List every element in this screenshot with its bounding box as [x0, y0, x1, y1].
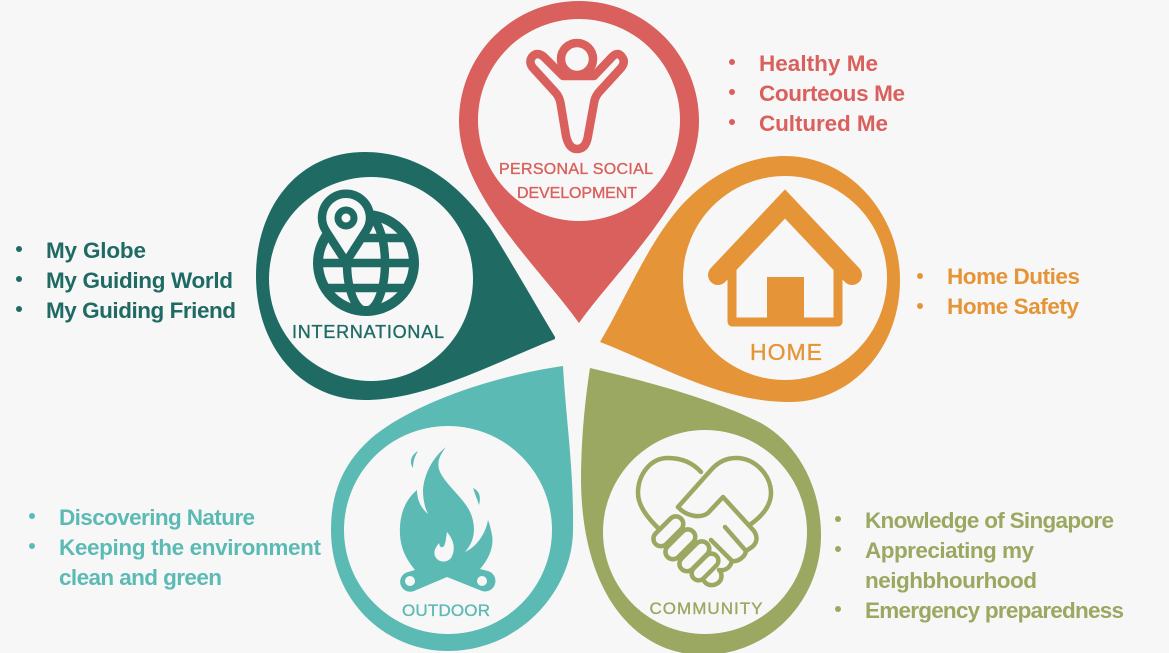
list: community topics: Appreciating my: [865, 538, 1034, 563]
pin inner circle: [269, 177, 473, 381]
icon: campfire: [400, 447, 495, 592]
list: personal social development topics: Healthy Me: [759, 51, 878, 76]
orange pin shape: [600, 156, 900, 402]
list: community topics: [835, 508, 1124, 623]
list: personal social development topics: [729, 51, 905, 136]
list: personal social development topics: Courteous Me: [759, 81, 905, 106]
list: home topics: Home Duties: [947, 264, 1080, 289]
pin inner circle: [344, 426, 552, 634]
list: international topics: My Globe: [46, 238, 146, 263]
label: home: HOME: [750, 339, 822, 365]
list: international topics: My Guiding World: [46, 268, 233, 293]
label: community: COMMUNITY: [650, 599, 762, 618]
olive pin shape: [581, 368, 821, 653]
list: outdoor topics: Discovering Nature: [59, 505, 255, 530]
red pin shape: [459, 1, 699, 323]
list: personal social development topics: Cultured Me: [759, 111, 888, 136]
icon: handshake heart: [638, 458, 771, 585]
list: outdoor topics: [29, 505, 322, 590]
panel: home: [600, 156, 900, 402]
list: home topics: Home Safety: [947, 294, 1079, 319]
list: community topics: Emergency preparedness: [865, 598, 1124, 623]
list: community topics: neighbhourhood: [865, 568, 1037, 593]
label: personal social development: DEVELOPMENT: [517, 185, 637, 202]
list: community topics: Knowledge of Singapore: [865, 508, 1114, 533]
label: personal social development: PERSONAL SOCIAL: [499, 161, 653, 178]
panel: personal social development: [459, 1, 699, 323]
panel: community: [581, 368, 821, 653]
icon: house: [718, 204, 852, 322]
dark teal pin shape: [256, 152, 555, 400]
icon: person with raised arms: [530, 43, 624, 149]
list: international topics: [16, 238, 236, 323]
pin inner circle: [683, 176, 887, 380]
light teal pin shape: [331, 366, 573, 651]
label: international: INTERNATIONAL: [292, 322, 444, 342]
panel: outdoor: [331, 366, 573, 651]
list: international topics: My Guiding Friend: [46, 298, 236, 323]
list: outdoor topics: Keeping the environment: [59, 535, 322, 560]
pin inner circle: [603, 430, 807, 634]
list: home topics: [917, 264, 1080, 319]
pin inner circle: [478, 19, 680, 221]
icon: globe with location pin: [318, 194, 414, 311]
list: outdoor topics: clean and green: [59, 565, 222, 590]
label: outdoor: OUTDOOR: [402, 601, 490, 620]
panel: international: [256, 152, 555, 400]
